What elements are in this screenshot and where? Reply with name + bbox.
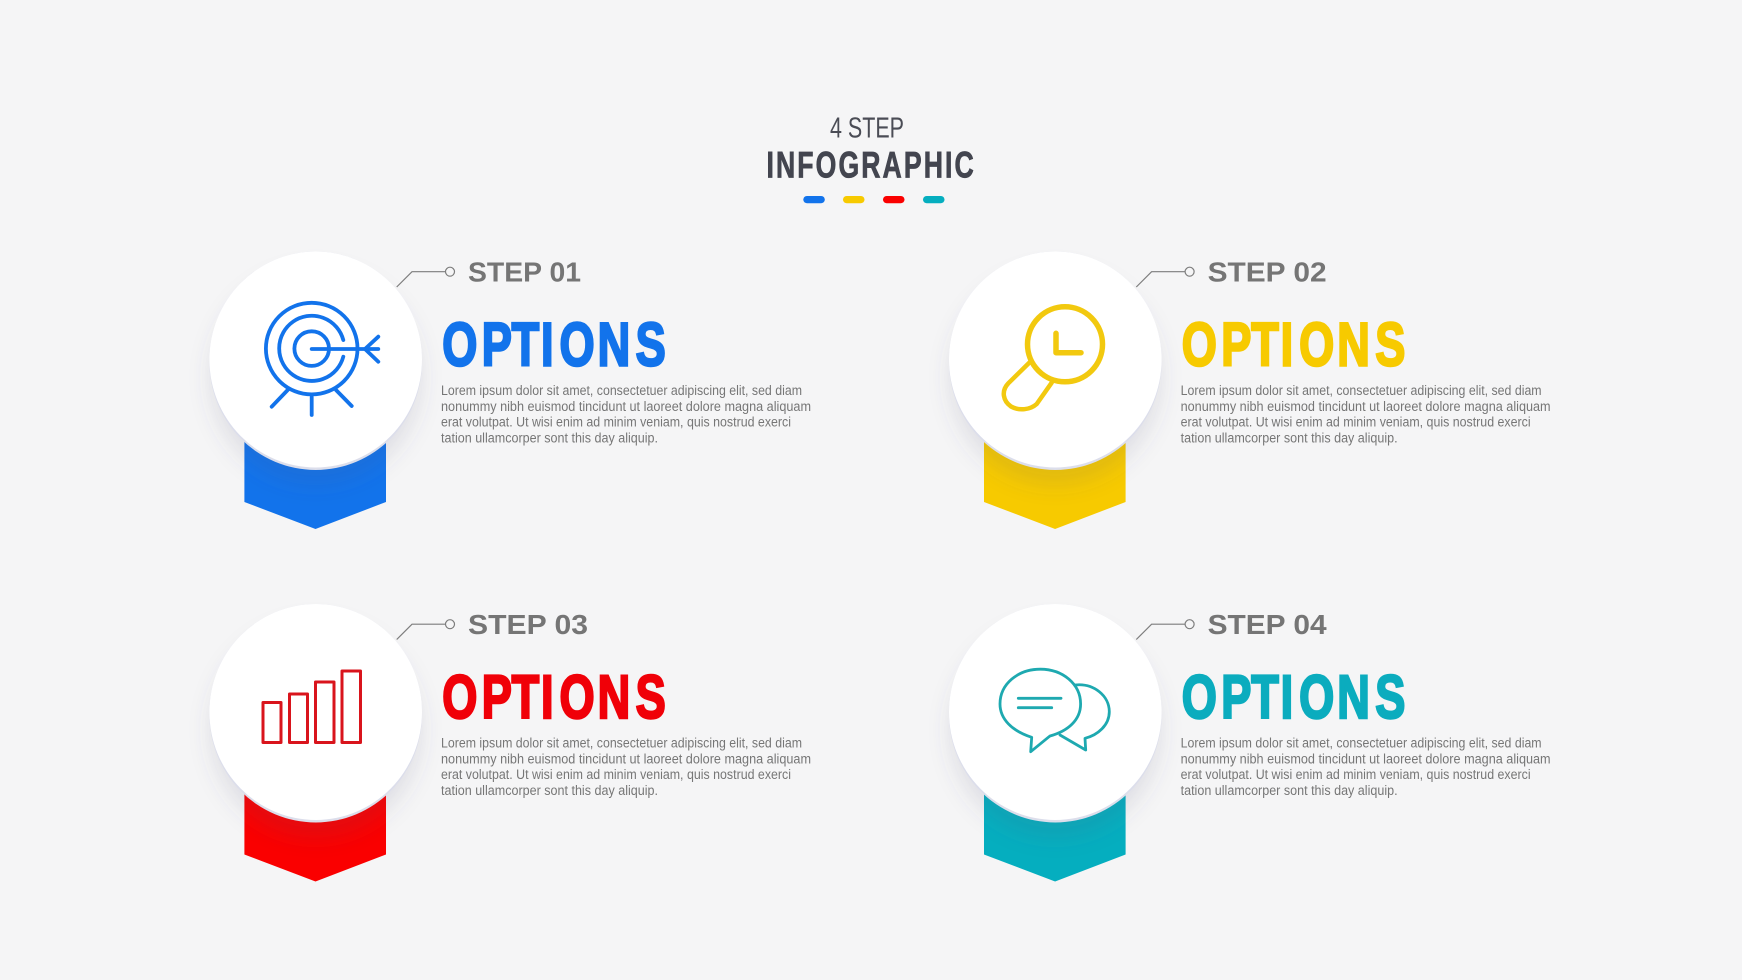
leader line (397, 267, 454, 287)
body text: Lorem ipsum dolor sit amet, consectetuer adipiscing elit, sed diam (441, 736, 802, 750)
step label: STEP 04 (1208, 609, 1327, 640)
body text: nonummy nibh euismod tincidunt ut laoreet dolore magna aliquam (441, 752, 811, 766)
body text: Lorem ipsum dolor sit amet, consectetuer adipiscing elit, sed diam (441, 383, 802, 398)
icon: magnifier with clock (1004, 307, 1102, 409)
body text: Lorem ipsum dolor sit amet, consectetuer adipiscing elit, sed diam (1181, 383, 1542, 398)
heading: OPTIONS (1182, 311, 1405, 379)
title line: infographic: INFOGRAPHIC (766, 144, 976, 186)
circle badge (209, 604, 422, 822)
body text: erat volutpat. Ut wisi enim ad minim veniam, quis nostrud exerci (1181, 767, 1531, 782)
icon: chat bubbles (1000, 669, 1109, 752)
panel: step 04 (949, 604, 1551, 882)
icon: bar chart (263, 671, 360, 742)
step label: STEP 02 (1208, 257, 1327, 288)
ribbon (244, 430, 386, 529)
body text (441, 383, 811, 446)
body text: tation ullamcorper sont this day aliquip. (1181, 783, 1398, 798)
body text: tation ullamcorper sont this day aliquip. (441, 783, 658, 798)
ribbon (244, 782, 386, 882)
leader line (1136, 620, 1194, 640)
body text: nonummy nibh euismod tincidunt ut laoreet dolore magna aliquam (1181, 399, 1551, 414)
ribbon (984, 782, 1126, 882)
heading: OPTIONS (442, 663, 666, 732)
leader line (397, 620, 454, 640)
step label: STEP 01 (468, 257, 581, 288)
body text: tation ullamcorper sont this day aliquip. (1181, 431, 1398, 446)
colour dashes (803, 196, 944, 203)
body text (441, 736, 811, 798)
body text: Lorem ipsum dolor sit amet, consectetuer adipiscing elit, sed diam (1181, 736, 1542, 750)
body text: erat volutpat. Ut wisi enim ad minim veniam, quis nostrud exerci (1181, 415, 1531, 430)
body text: tation ullamcorper sont this day aliquip. (441, 431, 658, 446)
circle badge (949, 604, 1162, 822)
body text: erat volutpat. Ut wisi enim ad minim veniam, quis nostrud exerci (441, 415, 791, 430)
step label: STEP 03 (468, 609, 588, 640)
body text (1181, 383, 1551, 446)
leader line (1136, 267, 1194, 287)
panel: step 02 (949, 252, 1551, 529)
body text: erat volutpat. Ut wisi enim ad minim veniam, quis nostrud exerci (441, 767, 791, 782)
icon: target with arrow (266, 303, 378, 415)
body text (1181, 736, 1551, 798)
panel: step 03 (209, 604, 811, 882)
heading: OPTIONS (442, 311, 666, 379)
body text: nonummy nibh euismod tincidunt ut laoreet dolore magna aliquam (441, 399, 811, 414)
panel: step 01 (209, 252, 811, 529)
body text: nonummy nibh euismod tincidunt ut laoreet dolore magna aliquam (1181, 752, 1551, 766)
title line: 4 step: 4 STEP (830, 113, 904, 145)
ribbon (984, 430, 1126, 529)
circle badge (949, 252, 1162, 470)
heading: OPTIONS (1182, 663, 1405, 732)
circle badge (209, 252, 422, 470)
title (766, 113, 976, 186)
